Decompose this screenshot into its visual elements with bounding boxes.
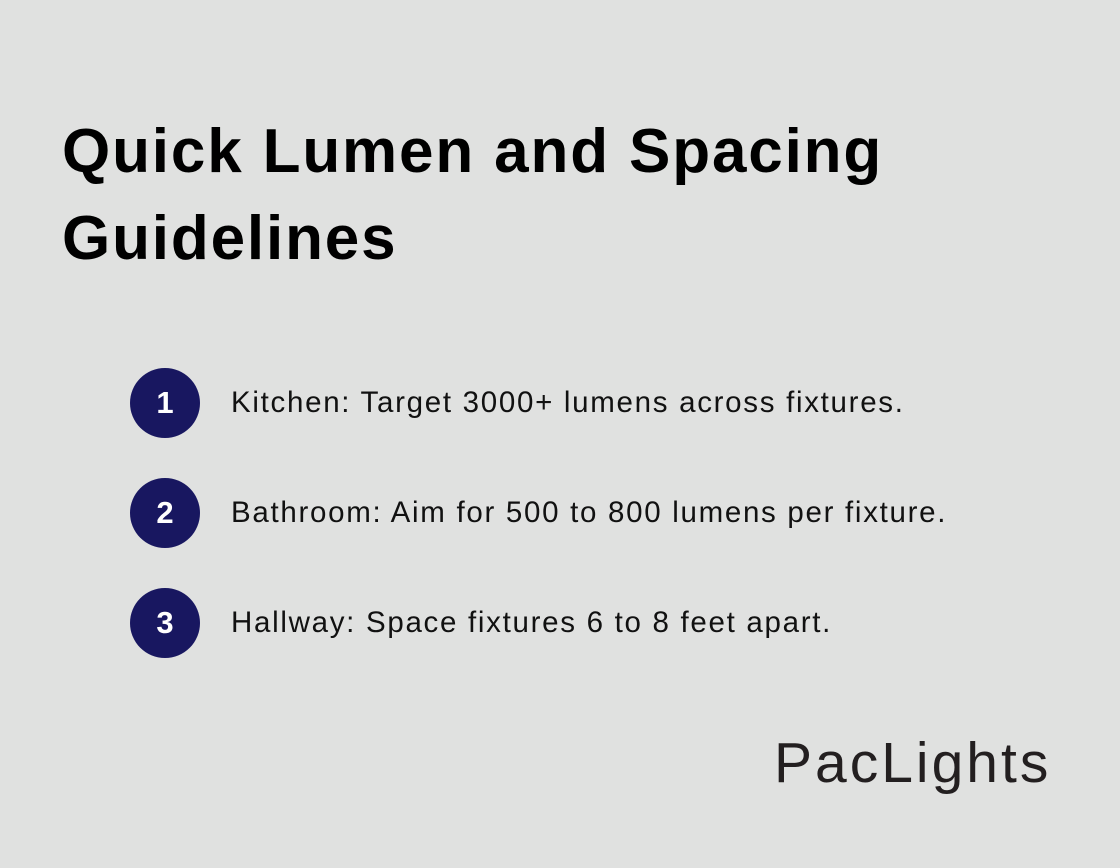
badge 2: 2 <box>156 495 174 530</box>
title: Quick Lumen and Spacing <box>62 117 883 186</box>
text 1: Kitchen: Target 3000+ lumens across fixtures. <box>231 386 905 419</box>
item 3 <box>130 588 832 658</box>
badge 3: 3 <box>156 605 174 640</box>
logo: PacLights <box>774 731 1051 795</box>
badge 3 <box>130 588 200 658</box>
badge 1 <box>130 368 200 438</box>
title <box>62 117 883 273</box>
title: Guidelines <box>62 204 397 273</box>
badge 1: 1 <box>156 385 174 420</box>
item 2 <box>130 478 947 548</box>
badge 2 <box>130 478 200 548</box>
text 3: Hallway: Space fixtures 6 to 8 feet apart. <box>231 606 832 639</box>
item 1 <box>130 368 905 438</box>
text 2: Bathroom: Aim for 500 to 800 lumens per fixture. <box>231 496 947 529</box>
